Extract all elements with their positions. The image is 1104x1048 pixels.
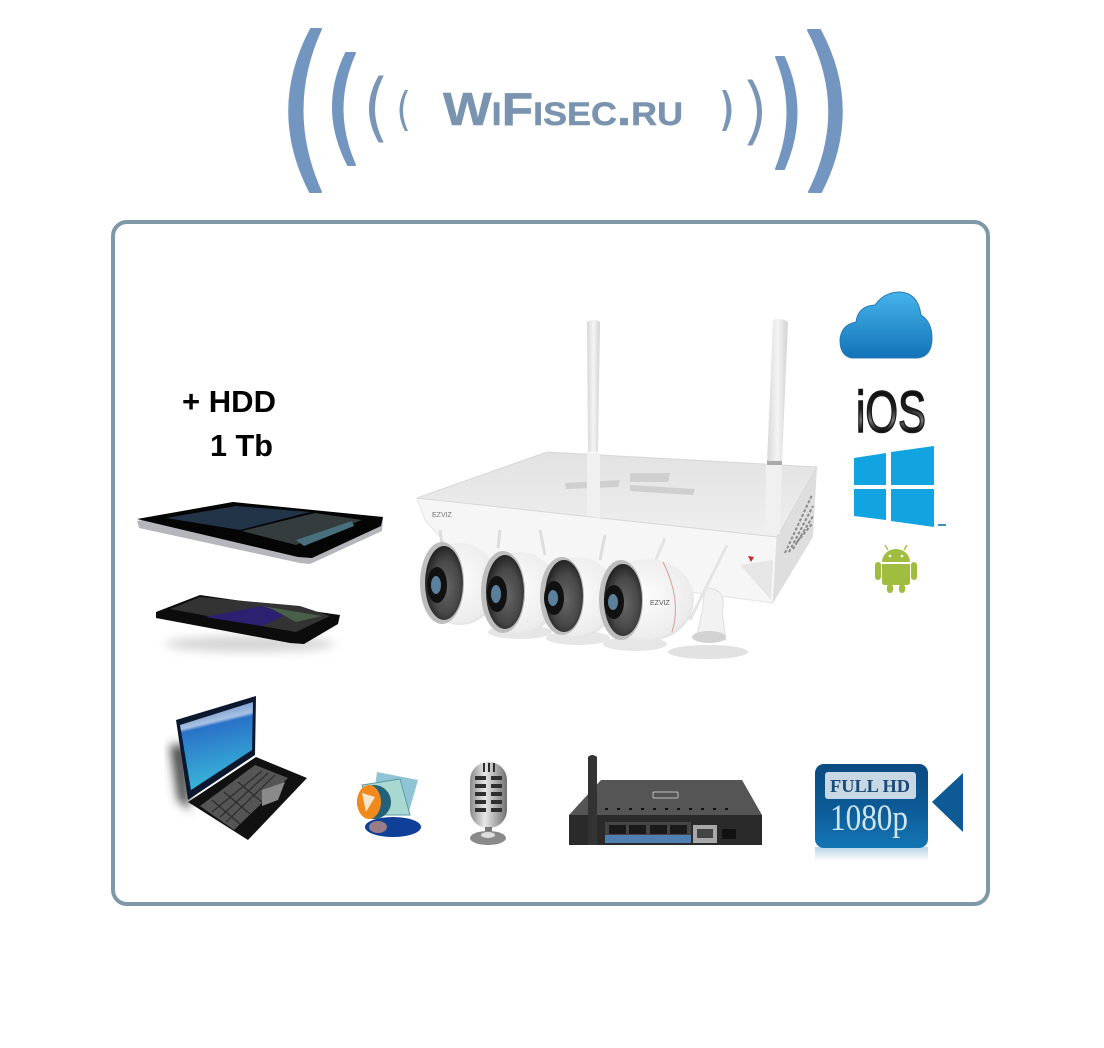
NVR recorder: EZVIZ bbox=[432, 512, 453, 519]
icon: microphone bbox=[470, 762, 507, 845]
camera 1 bbox=[420, 530, 500, 625]
arcs: right signal waves bbox=[722, 30, 842, 192]
text: iOS logo: iOS bbox=[856, 380, 926, 445]
icon: wifi router bbox=[569, 755, 762, 845]
arcs: left signal waves bbox=[289, 29, 408, 192]
1080p resolution: 1080p bbox=[830, 798, 908, 839]
icon: Android logo bbox=[875, 545, 917, 593]
NVR recorder bbox=[417, 452, 817, 603]
antennas bbox=[587, 319, 788, 534]
camera 2 bbox=[481, 530, 558, 634]
text: HDD capacity: 1 Tb bbox=[210, 428, 273, 463]
text: HDD capacity bbox=[182, 384, 276, 463]
icon: tablet bbox=[137, 502, 383, 564]
icon: cloud bbox=[840, 292, 932, 358]
logo: wifi signal arcs and site name bbox=[289, 29, 842, 192]
site name: WiFisec.ru bbox=[443, 83, 683, 135]
text: HDD capacity: + HDD bbox=[182, 384, 276, 419]
camera 4: EZVIZ bbox=[650, 600, 671, 607]
icon: Full HD 1080p camera badge bbox=[815, 764, 963, 861]
camera 3 bbox=[540, 535, 616, 637]
icon: smartphone bbox=[156, 595, 340, 652]
camera 4 bbox=[599, 538, 727, 641]
icon: media player bbox=[357, 772, 421, 837]
icon: laptop bbox=[170, 696, 307, 840]
main product: NVR with antennas and four cameras bbox=[417, 319, 817, 659]
FULL HD label: FULL HD bbox=[830, 776, 910, 796]
FULL HD label bbox=[825, 772, 916, 799]
camera bases bbox=[488, 588, 748, 659]
icon: Windows logo bbox=[854, 446, 946, 527]
panel: product contents frame bbox=[113, 222, 988, 904]
